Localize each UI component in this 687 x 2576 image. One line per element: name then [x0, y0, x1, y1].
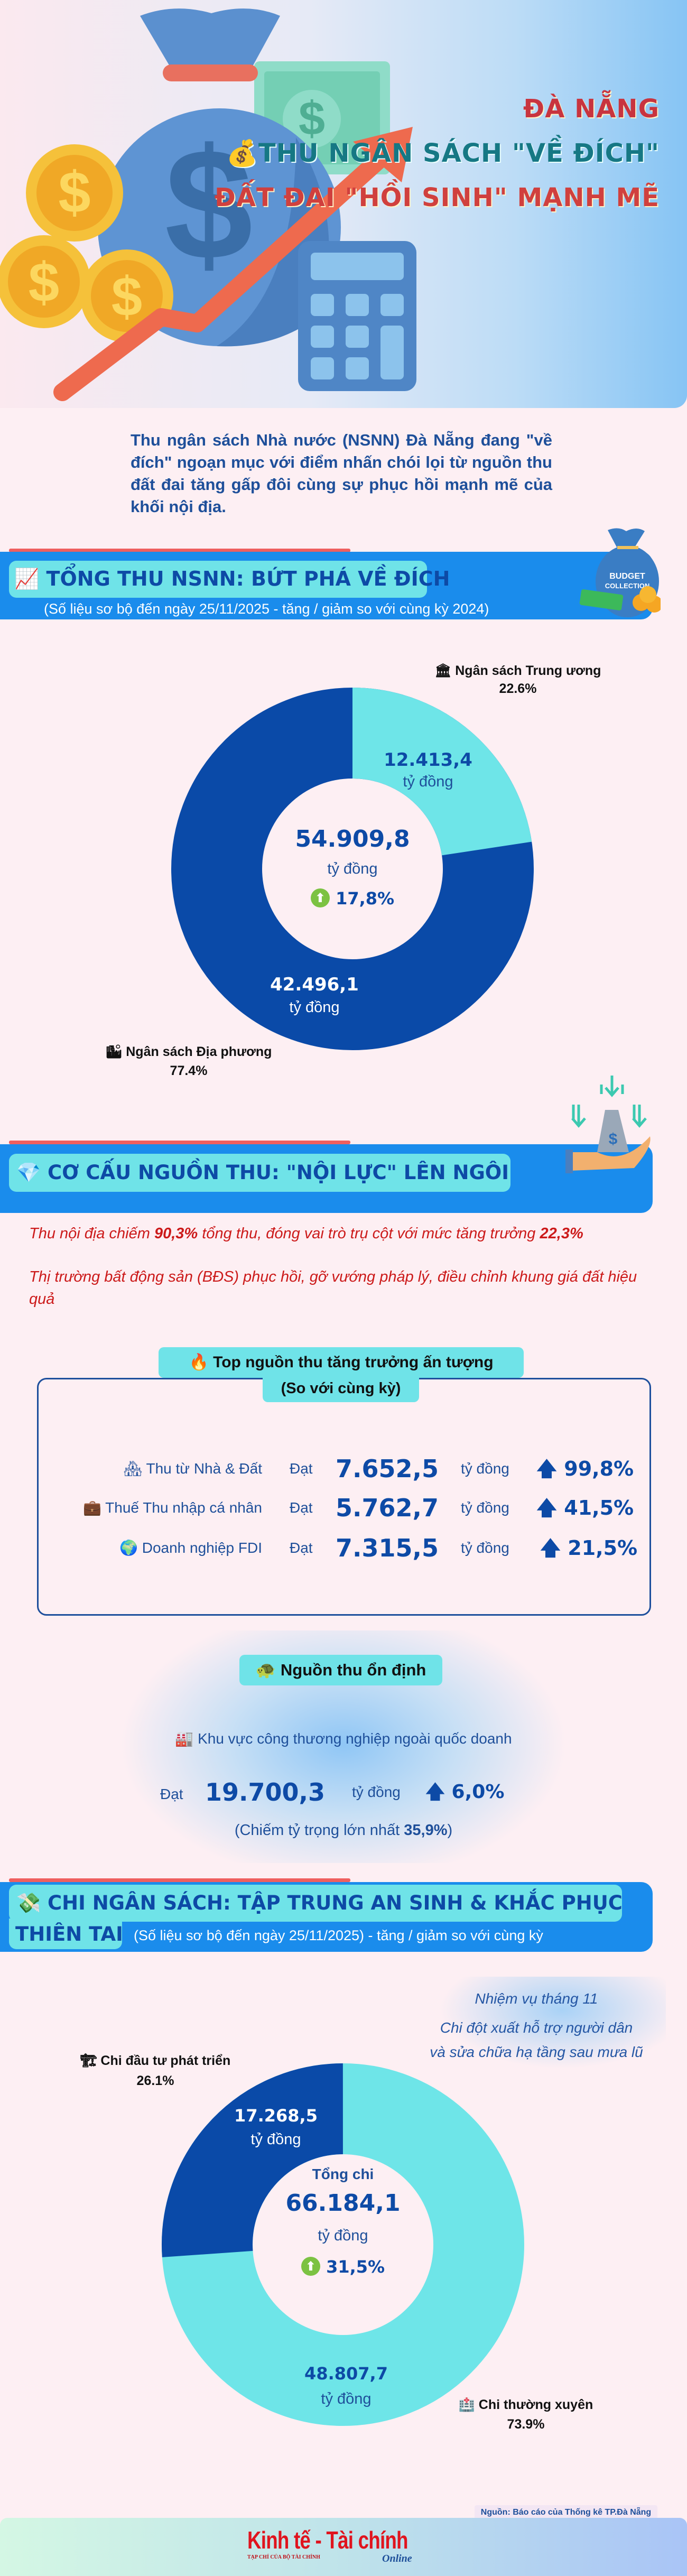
center total: tỷ đồng — [327, 860, 378, 877]
logo: Online — [382, 2553, 412, 2564]
label: investment — [80, 2053, 230, 2088]
panel: stable revenue — [0, 1630, 687, 1863]
center total: tỷ đồng — [318, 2227, 368, 2244]
sector label: 🏭 Khu vực công thương nghiệp ngoài quốc doanh — [175, 1730, 512, 1747]
center total: Tổng chi — [312, 2166, 374, 2182]
logo: TẠP CHÍ CỦA BỘ TÀI CHÍNH — [247, 2554, 320, 2560]
title pill line 1: 💸 CHI NGÂN SÁCH: TẬP TRUNG AN SINH & KHẮC PHỤC — [16, 1892, 623, 1914]
row: land: tỷ đồng — [461, 1460, 509, 1477]
row: personal income tax: 5.762,7 — [336, 1494, 439, 1522]
label: recurrent — [459, 2397, 593, 2432]
note: November task — [407, 1977, 666, 2072]
icon: budget bag — [579, 529, 661, 617]
money bag — [98, 8, 341, 346]
section 3 header — [0, 1878, 653, 1952]
title pill line 2 — [9, 1919, 122, 1949]
title pill: 💎 CƠ CẤU NGUỒN THU: "NỘI LỰC" LÊN NGÔI — [16, 1161, 509, 1184]
source note: Nguồn: Báo cáo của Thống kê TP.Đà Nẵng — [481, 2508, 651, 2517]
coins — [0, 144, 173, 342]
icon: budget bag: BUDGET — [609, 572, 645, 581]
row: land: Đạt — [290, 1460, 313, 1477]
donut chart: total revenue — [106, 663, 601, 1078]
value: central: 12.413,4 — [384, 749, 472, 771]
center total: ⬆ — [315, 891, 326, 905]
center total — [295, 826, 410, 909]
heading pill: 🔥 Top nguồn thu tăng trưởng ấn tượng — [189, 1354, 494, 1371]
hero illustration — [0, 8, 416, 401]
panel: top revenue sources — [37, 1347, 651, 1616]
value row: tỷ đồng — [352, 1784, 401, 1800]
heading pill — [239, 1655, 442, 1685]
source note — [475, 2505, 657, 2520]
money bag: $ — [165, 115, 253, 293]
value: central — [384, 749, 472, 790]
row: personal income tax: 🡅 41,5% — [536, 1496, 634, 1519]
banknote — [254, 61, 390, 174]
row: personal income tax — [83, 1494, 634, 1522]
row: FDI: 🡅 21,5% — [540, 1536, 637, 1560]
highlight text — [29, 1225, 637, 1308]
label: investment: 26.1% — [137, 2073, 174, 2088]
value: investment: 17.268,5 — [234, 2106, 318, 2126]
label: local budget: 🏙 Ngân sách Địa phương — [106, 1044, 272, 1059]
value row: 19.700,3 — [205, 1778, 325, 1806]
growth arrow — [62, 127, 413, 392]
row: personal income tax: tỷ đồng — [461, 1499, 509, 1516]
center total: 66.184,1 — [285, 2190, 401, 2217]
label: local budget: 77.4% — [170, 1063, 207, 1078]
hero banner — [0, 0, 687, 408]
icon: budget bag: COLLECTION — [605, 582, 649, 590]
banknote: $ — [299, 92, 325, 145]
title: ĐẤT ĐAI "HỒI SINH" MẠNH MẼ — [215, 183, 660, 212]
center total: ⬆ — [305, 2259, 316, 2274]
row: personal income tax: 💼 Thuế Thu nhập cá nhân — [83, 1499, 262, 1516]
title pill — [9, 1154, 510, 1192]
center total: 31,5% — [326, 2257, 385, 2277]
value row: 🡅 6,0% — [425, 1781, 504, 1803]
title: 💰THU NGÂN SÁCH "VỀ ĐÍCH" — [226, 138, 660, 168]
row: land — [124, 1454, 634, 1483]
subtitle: (Số liệu sơ bộ đến ngày 25/11/2025 - tăng / giảm so với cùng kỳ 2024) — [44, 601, 489, 617]
row: land: 🏘 Thu từ Nhà & Đất — [124, 1460, 262, 1477]
title pill line 1 — [9, 1885, 622, 1922]
note: November task: Nhiệm vụ tháng 11 — [475, 1990, 598, 2007]
value: investment: tỷ đồng — [250, 2131, 301, 2148]
icon: hand with money bag — [565, 1076, 651, 1173]
title pill: 📈 TỔNG THU NSNN: BỨT PHÁ VỀ ĐÍCH — [14, 567, 450, 590]
calculator — [298, 241, 416, 391]
logo: Kinh tế - Tài chính — [247, 2526, 408, 2554]
heading pill: 🐢 Nguồn thu ổn định — [256, 1661, 426, 1679]
row: FDI: 7.315,5 — [336, 1534, 439, 1562]
title: ĐÀ NẴNG — [523, 94, 660, 124]
label: recurrent: 73.9% — [507, 2417, 544, 2432]
center total — [285, 2166, 401, 2277]
coins: $ — [58, 160, 91, 225]
highlight text: Thu nội địa chiếm 90,3% tổng thu, đóng vai trò trụ cột với mức tăng trưởng 22,3% — [29, 1225, 583, 1242]
title — [215, 90, 660, 212]
label: central budget: 🏛 Ngân sách Trung ương — [435, 663, 601, 678]
row: FDI: 🌍 Doanh nghiệp FDI — [119, 1540, 262, 1556]
value: local — [270, 974, 359, 1016]
label: investment: 🏗 Chi đầu tư phát triển — [80, 2053, 230, 2068]
donut chart: total spending — [80, 2053, 593, 2432]
subtitle: (Số liệu sơ bộ đến ngày 25/11/2025) - tăng / giảm so với cùng kỳ — [134, 1928, 543, 1943]
row: land: 🡅 99,8% — [536, 1457, 634, 1480]
panel: top revenue sources: (So với cùng kỳ) — [281, 1380, 401, 1397]
value: investment — [234, 2106, 318, 2148]
label: local budget — [106, 1044, 272, 1078]
section 2 header — [0, 1076, 653, 1213]
value: recurrent: tỷ đồng — [321, 2390, 372, 2407]
value: local: tỷ đồng — [289, 999, 340, 1016]
value: recurrent: 48.807,7 — [304, 2364, 388, 2384]
coins: $ — [29, 252, 59, 313]
note: November task: Chi đột xuất hỗ trợ người dân — [440, 2019, 633, 2036]
heading pill — [159, 1347, 524, 1378]
row: FDI: tỷ đồng — [461, 1540, 509, 1556]
label: recurrent: 🏥 Chi thường xuyên — [459, 2397, 593, 2412]
value: local: 42.496,1 — [270, 974, 359, 995]
value row: Đạt — [160, 1786, 183, 1802]
label: central budget: 22.6% — [499, 681, 536, 696]
intro paragraph: Thu ngân sách Nhà nước (NSNN) Đà Nẵng đang "về đích" ngoạn mục với điểm nhấn chói lọi từ nguồn thu đất đai tăng gấp đôi cùng sự phục hồi mạnh mẽ của khối nội địa. — [131, 431, 552, 516]
value row — [160, 1778, 504, 1806]
share note: (Chiếm tỷ trọng lớn nhất 35,9%) — [235, 1822, 452, 1839]
label: central budget — [435, 663, 601, 696]
value: central: tỷ đồng — [403, 773, 453, 790]
section 1 header — [0, 529, 661, 619]
center total: 17,8% — [336, 888, 394, 909]
row: FDI: Đạt — [290, 1540, 313, 1556]
row: FDI — [119, 1534, 637, 1562]
icon: hand with money bag: $ — [609, 1131, 618, 1148]
note: November task: và sửa chữa hạ tầng sau mưa lũ — [430, 2044, 643, 2060]
footer logo band — [0, 2518, 687, 2576]
value: recurrent — [304, 2364, 388, 2407]
coins: $ — [112, 266, 142, 328]
row: personal income tax: Đạt — [290, 1499, 313, 1516]
title pill — [9, 561, 427, 598]
center total: 54.909,8 — [295, 826, 410, 853]
title pill line 2: THIÊN TAI — [15, 1923, 123, 1945]
row: land: 7.652,5 — [336, 1454, 439, 1483]
highlight text: Thị trường bất động sản (BĐS) phục hồi, gỡ vướng pháp lý, điều chỉnh khung giá đất hiệu quả — [29, 1268, 637, 1308]
